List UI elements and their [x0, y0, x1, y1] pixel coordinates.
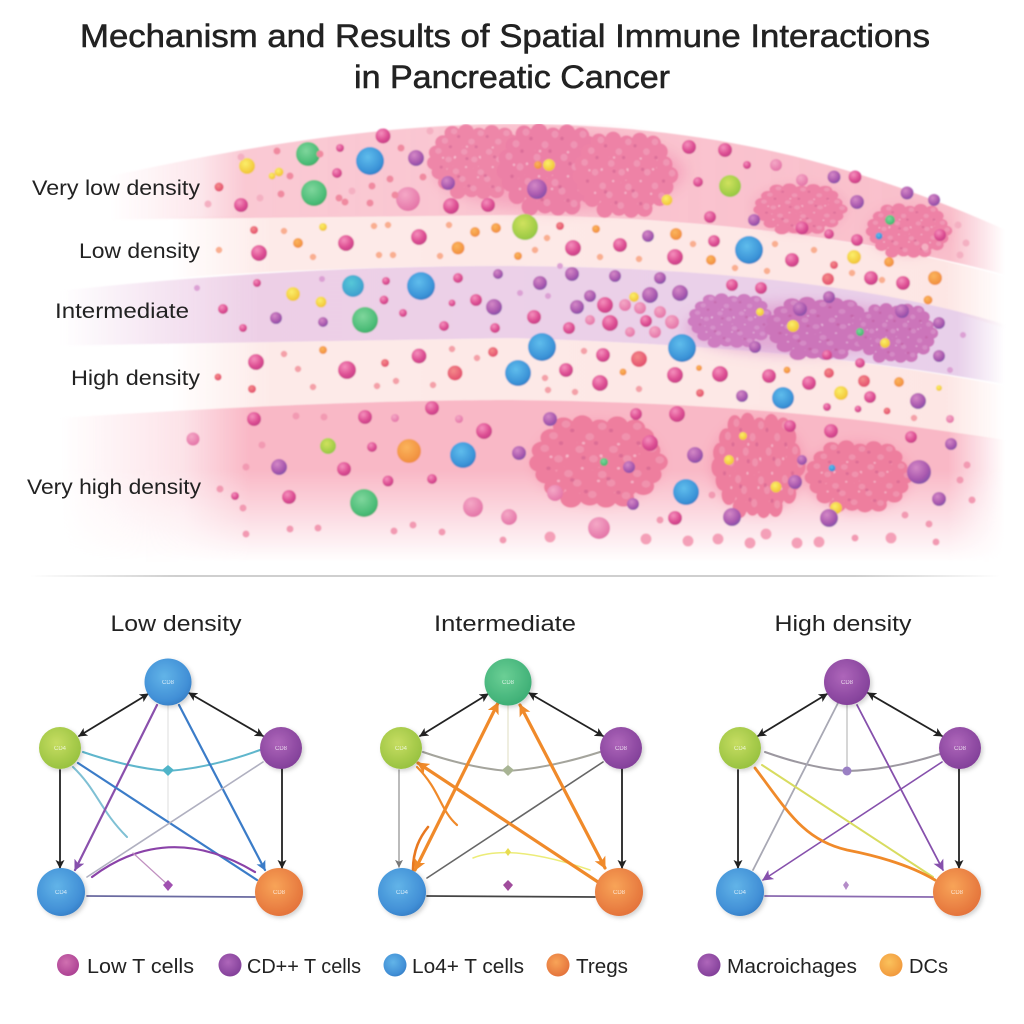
band: high density background: [150, 338, 1010, 442]
network nodes: low density: CD4: [55, 890, 68, 896]
band labels: Very low density: [32, 177, 201, 200]
panel: high density network: [716, 611, 981, 916]
network nodes: high density: CD4: [734, 890, 747, 896]
tissue artwork: [0, 124, 1024, 565]
band: intermediate background: [30, 266, 1010, 385]
band labels: Intermediate: [55, 300, 189, 323]
network nodes: intermediate: CD8: [502, 680, 515, 686]
title: in Pancreatic Cancer: [354, 59, 670, 95]
legend item: Tregs: Tregs: [576, 956, 628, 978]
heading: high density: High density: [774, 611, 912, 636]
network edges: high density: [738, 693, 959, 897]
band labels: Low density: [79, 240, 201, 263]
legend item: Lo4+ T cells: [384, 954, 524, 978]
network nodes: intermediate: CD8: [615, 746, 628, 752]
cluster bases: [435, 134, 946, 509]
band fade: bottom of very high density: [0, 470, 1024, 565]
cells: low density: [219, 214, 942, 304]
panel: tissue density bands: [0, 124, 1024, 565]
legend item: CD++ T cells: CD++ T cells: [247, 956, 361, 978]
cell clusters: [435, 131, 947, 508]
network nodes: intermediate: [378, 658, 643, 916]
panel: low density network: [37, 611, 303, 916]
band labels: [27, 177, 202, 499]
cells: intermediate: [197, 266, 963, 370]
network nodes: intermediate: CD4: [396, 890, 409, 896]
legend item: Low T cells: [57, 954, 194, 978]
network nodes: low density: CD4: [54, 746, 67, 752]
network nodes: high density: CD8: [951, 890, 964, 896]
band labels: Very high density: [27, 476, 202, 499]
network edges: low density: [60, 693, 282, 897]
band: low density background: [150, 215, 1010, 330]
network nodes: intermediate: CD8: [613, 890, 626, 896]
panel: intermediate network: [378, 611, 643, 916]
network nodes: low density: CD8: [162, 680, 175, 686]
network nodes: intermediate: CD4: [395, 746, 408, 752]
network edges: intermediate: [399, 693, 622, 897]
legend item: Tregs: [546, 954, 628, 978]
legend item: Low T cells: Low T cells: [87, 956, 194, 978]
band labels: High density: [71, 367, 201, 390]
title: [80, 18, 930, 95]
title: Mechanism and Results of Spatial Immune Interactions: [80, 18, 930, 54]
legend item: DCs: [880, 954, 948, 978]
cells: high density: [214, 333, 954, 423]
legend item: Lo4+ T cells: Lo4+ T cells: [412, 956, 524, 978]
network nodes: high density: CD8: [954, 746, 967, 752]
legend item: Macrophages: Macroichages: [727, 956, 857, 978]
network nodes: low density: CD8: [275, 746, 288, 752]
band: very low density background: [60, 124, 1010, 276]
legend: [57, 954, 948, 978]
cells: very low density: [208, 128, 966, 255]
network nodes: low density: CD8: [273, 890, 286, 896]
band: very high density background: [30, 400, 1010, 565]
network nodes: high density: [716, 659, 981, 916]
cells: very high density: [186, 401, 972, 543]
network nodes: low density: [37, 658, 303, 916]
legend item: DCs: DCs: [909, 956, 948, 978]
network nodes: high density: CD4: [734, 746, 747, 752]
network nodes: high density: CD8: [841, 680, 854, 686]
heading: intermediate: Intermediate: [434, 611, 576, 636]
heading: low density: Low density: [110, 611, 242, 636]
